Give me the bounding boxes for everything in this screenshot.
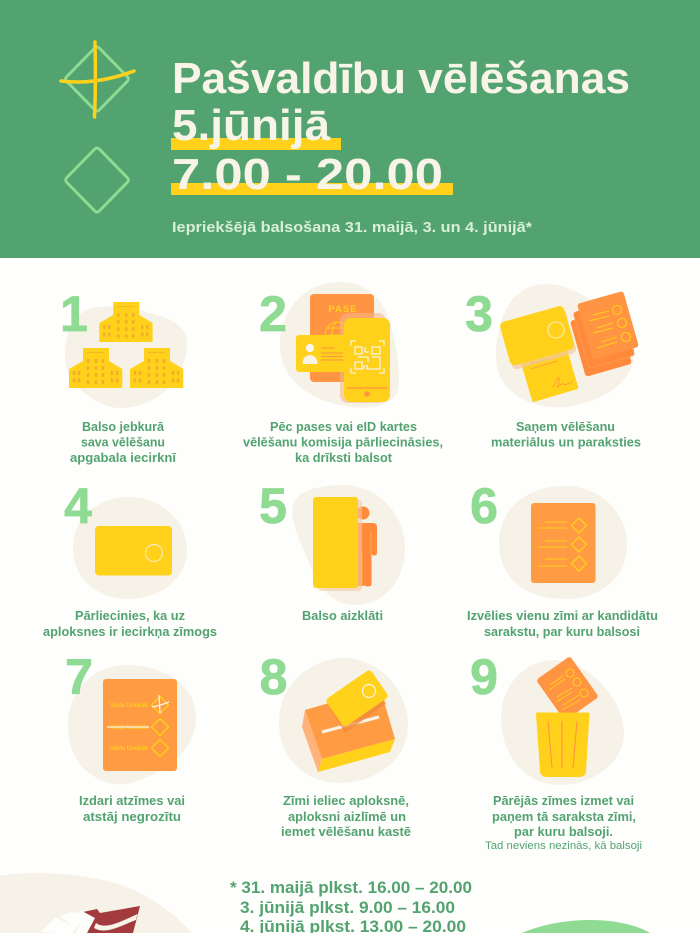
number 2: 2 bbox=[259, 286, 287, 342]
icon: voting booth bbox=[313, 497, 358, 588]
number 5: 5 bbox=[259, 478, 287, 534]
blob 1 bbox=[65, 307, 187, 408]
blob 4 bbox=[73, 497, 187, 599]
caption 6: sarakstu, par kuru balsosi bbox=[484, 624, 640, 639]
caption 7: Izdari atzīmes vai bbox=[79, 793, 185, 808]
booth shadow bbox=[318, 500, 362, 591]
date highlight bar bbox=[171, 138, 341, 150]
step 1 bbox=[60, 286, 187, 465]
caption 2 bbox=[243, 419, 443, 465]
date: 5.jūnijā bbox=[172, 101, 331, 150]
early voting schedule: * 31. maijā plkst. 16.00 – 20.00 bbox=[230, 878, 472, 897]
caption 9 bbox=[485, 793, 642, 852]
early voting note: Iepriekšējā balsošana 31. maijā, 3. un 4. jūnijā* bbox=[172, 219, 532, 236]
icon: envelope entering box bbox=[325, 669, 389, 733]
caption 2: Pēc pases vai eID kartes bbox=[270, 419, 417, 434]
icon: person bbox=[352, 506, 377, 586]
number 6: 6 bbox=[470, 478, 498, 534]
caption 9: Tad neviens nezinās, kā balsoji bbox=[485, 840, 642, 852]
caption 8: aploksni aizlīmē un bbox=[288, 809, 406, 824]
step 3 bbox=[465, 284, 641, 450]
number 8: 8 bbox=[260, 649, 287, 705]
caption 8: Zīmi ieliec aploksnē, bbox=[283, 793, 409, 808]
icon: marked ballot: Vārds Uzvārds bbox=[110, 746, 149, 752]
phone shadow bbox=[340, 313, 386, 403]
step 7 bbox=[65, 649, 196, 824]
blob 3 bbox=[496, 284, 634, 407]
caption 1: Balso jebkurā bbox=[82, 419, 165, 434]
caption 9: Pārējās zīmes izmet vai bbox=[493, 793, 634, 808]
caption 7: atstāj negrozītu bbox=[83, 809, 181, 824]
caption 6 bbox=[467, 608, 658, 639]
caption 3 bbox=[491, 419, 641, 450]
number 9: 9 bbox=[470, 649, 498, 705]
icon: envelope with stamp bbox=[95, 526, 172, 576]
step 2 bbox=[243, 282, 443, 465]
icon: marked ballot bbox=[103, 679, 177, 771]
number 4: 4 bbox=[64, 478, 92, 534]
caption 9: par kuru balsoji. bbox=[514, 824, 613, 839]
icon: discarded ballot bbox=[536, 656, 599, 721]
icon: marked diamond bbox=[61, 42, 134, 117]
icon: passport bbox=[310, 294, 374, 382]
icon: empty diamond bbox=[64, 147, 130, 213]
caption 1: sava vēlēšanu bbox=[81, 434, 165, 450]
early voting schedule: 3. jūnijā plkst. 9.00 – 16.00 bbox=[240, 898, 455, 917]
caption 1 bbox=[70, 419, 176, 465]
caption 8: iemet vēlēšanu kastē bbox=[281, 824, 411, 839]
icon: signature sheet bbox=[521, 349, 579, 402]
blob 7 bbox=[68, 665, 196, 784]
blob 8 bbox=[279, 658, 408, 783]
flag bbox=[83, 906, 140, 933]
time: 7.00 - 20.00 bbox=[172, 150, 443, 199]
caption 4 bbox=[43, 608, 217, 639]
step 5 bbox=[259, 478, 405, 623]
caption 1: apgabala iecirknī bbox=[70, 450, 176, 465]
caption 5: Balso aizklāti bbox=[302, 608, 383, 623]
caption 3: materiālus un paraksties bbox=[491, 434, 641, 450]
icon: passport: PASE bbox=[328, 304, 358, 315]
caption 3: Saņem vēlēšanu bbox=[516, 419, 615, 434]
title: Pašvaldību vēlēšanas bbox=[172, 54, 630, 103]
caption 2: vēlēšanu komisija pārliecināsies, bbox=[243, 434, 443, 450]
icon: ballot box bbox=[302, 688, 395, 772]
icon: marked ballot: Vārds Uzvārds bbox=[110, 725, 149, 731]
step 9 bbox=[470, 649, 642, 852]
green blob bottom right bbox=[522, 920, 650, 933]
step 4 bbox=[43, 478, 217, 639]
caption 9: paņem tā saraksta zīmi, bbox=[492, 809, 636, 824]
early voting schedule bbox=[230, 878, 472, 933]
cream blob bbox=[0, 873, 192, 933]
footer illustration: ballots and flag bbox=[0, 873, 192, 933]
caption 6: Izvēlies vienu zīmi ar kandidātu bbox=[467, 608, 658, 623]
icon: marked ballot: Vārds Uzvārds bbox=[110, 703, 149, 709]
icon: ballot stack bbox=[570, 291, 639, 377]
blob 6 bbox=[499, 486, 627, 599]
icon: ballot bbox=[531, 503, 596, 583]
icon: polling buildings bbox=[69, 302, 183, 388]
ballot papers bbox=[41, 911, 95, 933]
icon: waste bin bbox=[536, 712, 590, 777]
step 6 bbox=[467, 478, 658, 639]
icon: phone with QR code bbox=[344, 318, 390, 402]
blob 2 bbox=[280, 282, 399, 408]
time highlight bar bbox=[171, 183, 453, 195]
number 7: 7 bbox=[65, 649, 93, 705]
caption 2: ka drīksti balsot bbox=[295, 450, 393, 465]
caption 4: aploksnes ir iecirkņa zīmogs bbox=[43, 624, 217, 639]
caption 7 bbox=[79, 793, 185, 824]
header panel bbox=[0, 0, 700, 258]
caption 8 bbox=[281, 793, 411, 839]
number 3: 3 bbox=[465, 286, 493, 342]
icon: eID card bbox=[296, 335, 348, 372]
number 1: 1 bbox=[60, 286, 88, 342]
caption 4: Pārliecinies, ka uz bbox=[75, 608, 185, 623]
icon: envelope bbox=[499, 305, 577, 370]
blob 9 bbox=[501, 660, 624, 785]
step 8 bbox=[260, 649, 411, 839]
blob 5 bbox=[292, 485, 405, 605]
